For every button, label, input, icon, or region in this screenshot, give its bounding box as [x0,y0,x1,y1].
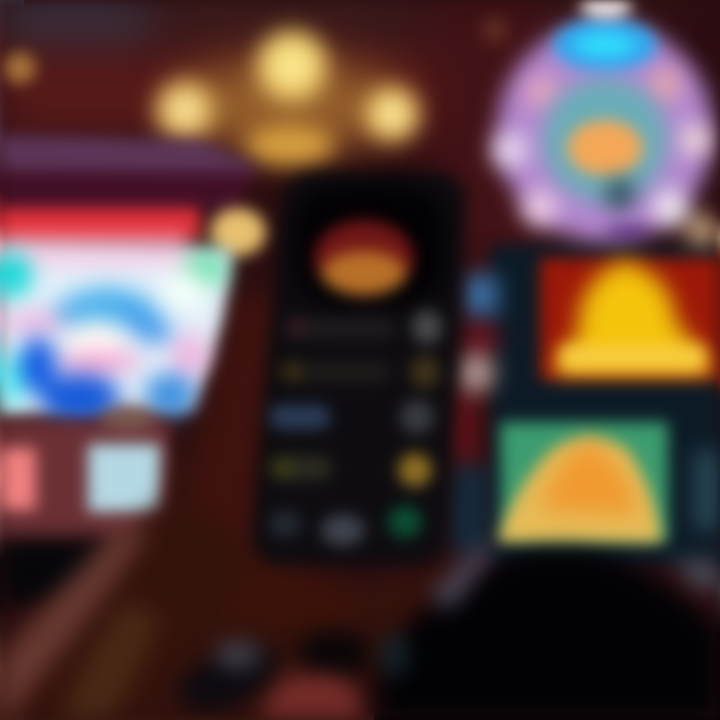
right machine cabinet [490,245,720,565]
foreground dark silhouette [175,545,720,720]
chandelier [155,30,420,165]
hand [0,290,470,720]
ceiling background [0,0,720,270]
prize wheel [492,0,718,246]
side buttons between phone and machine [444,275,498,555]
ceiling lights [4,16,509,84]
grey highlight on dark object [216,641,260,669]
yellow slot panel [540,258,720,380]
dark floor band [0,540,110,605]
left machine: top bands [0,135,266,256]
left machine: bright screen [0,244,232,422]
left machine: lower panels [0,406,170,540]
phone screen banner [314,220,414,296]
green and yellow slot panel [495,422,720,542]
phone [252,172,466,565]
phone menu rows [269,310,442,546]
